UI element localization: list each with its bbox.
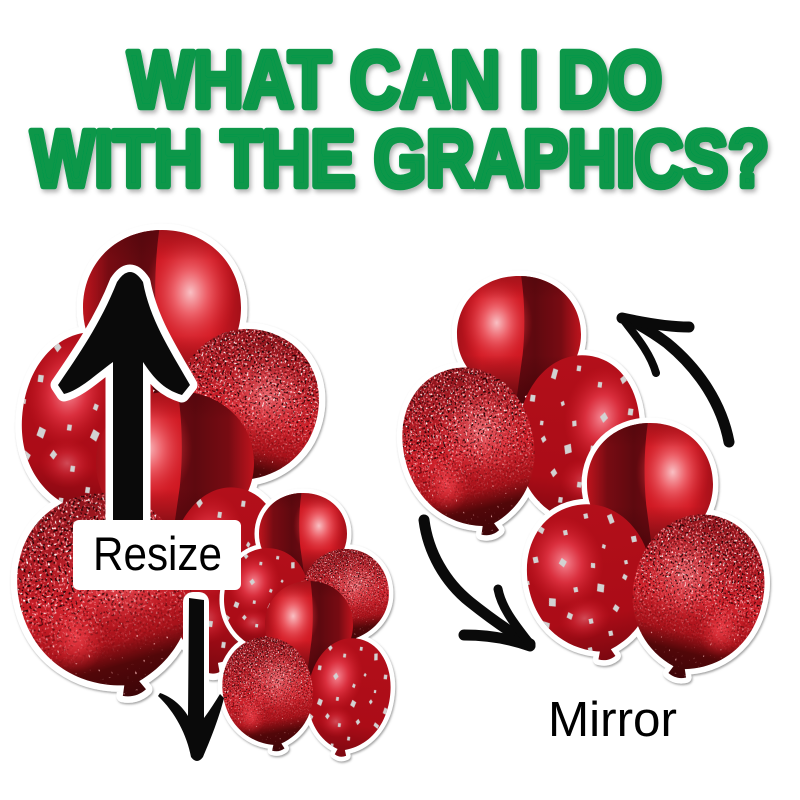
arrow: mirror curved down [424, 520, 530, 646]
arrow: mirror curved up [622, 318, 729, 442]
large balloon bouquet [0, 222, 334, 719]
label box: Resize [73, 520, 241, 590]
panel: resize example [0, 222, 397, 762]
lower balloon bouquet [514, 417, 780, 693]
arrow: resize up [58, 272, 190, 525]
small balloon bouquet [214, 489, 397, 762]
label: Mirror: Mirror [548, 693, 677, 747]
label box: Resize: Resize [93, 527, 222, 580]
upper balloon bouquet [387, 270, 650, 550]
title [31, 35, 769, 203]
title: WHAT CAN I DO [128, 35, 662, 124]
arrow: resize down [158, 592, 224, 761]
panel: mirror example [387, 270, 780, 747]
